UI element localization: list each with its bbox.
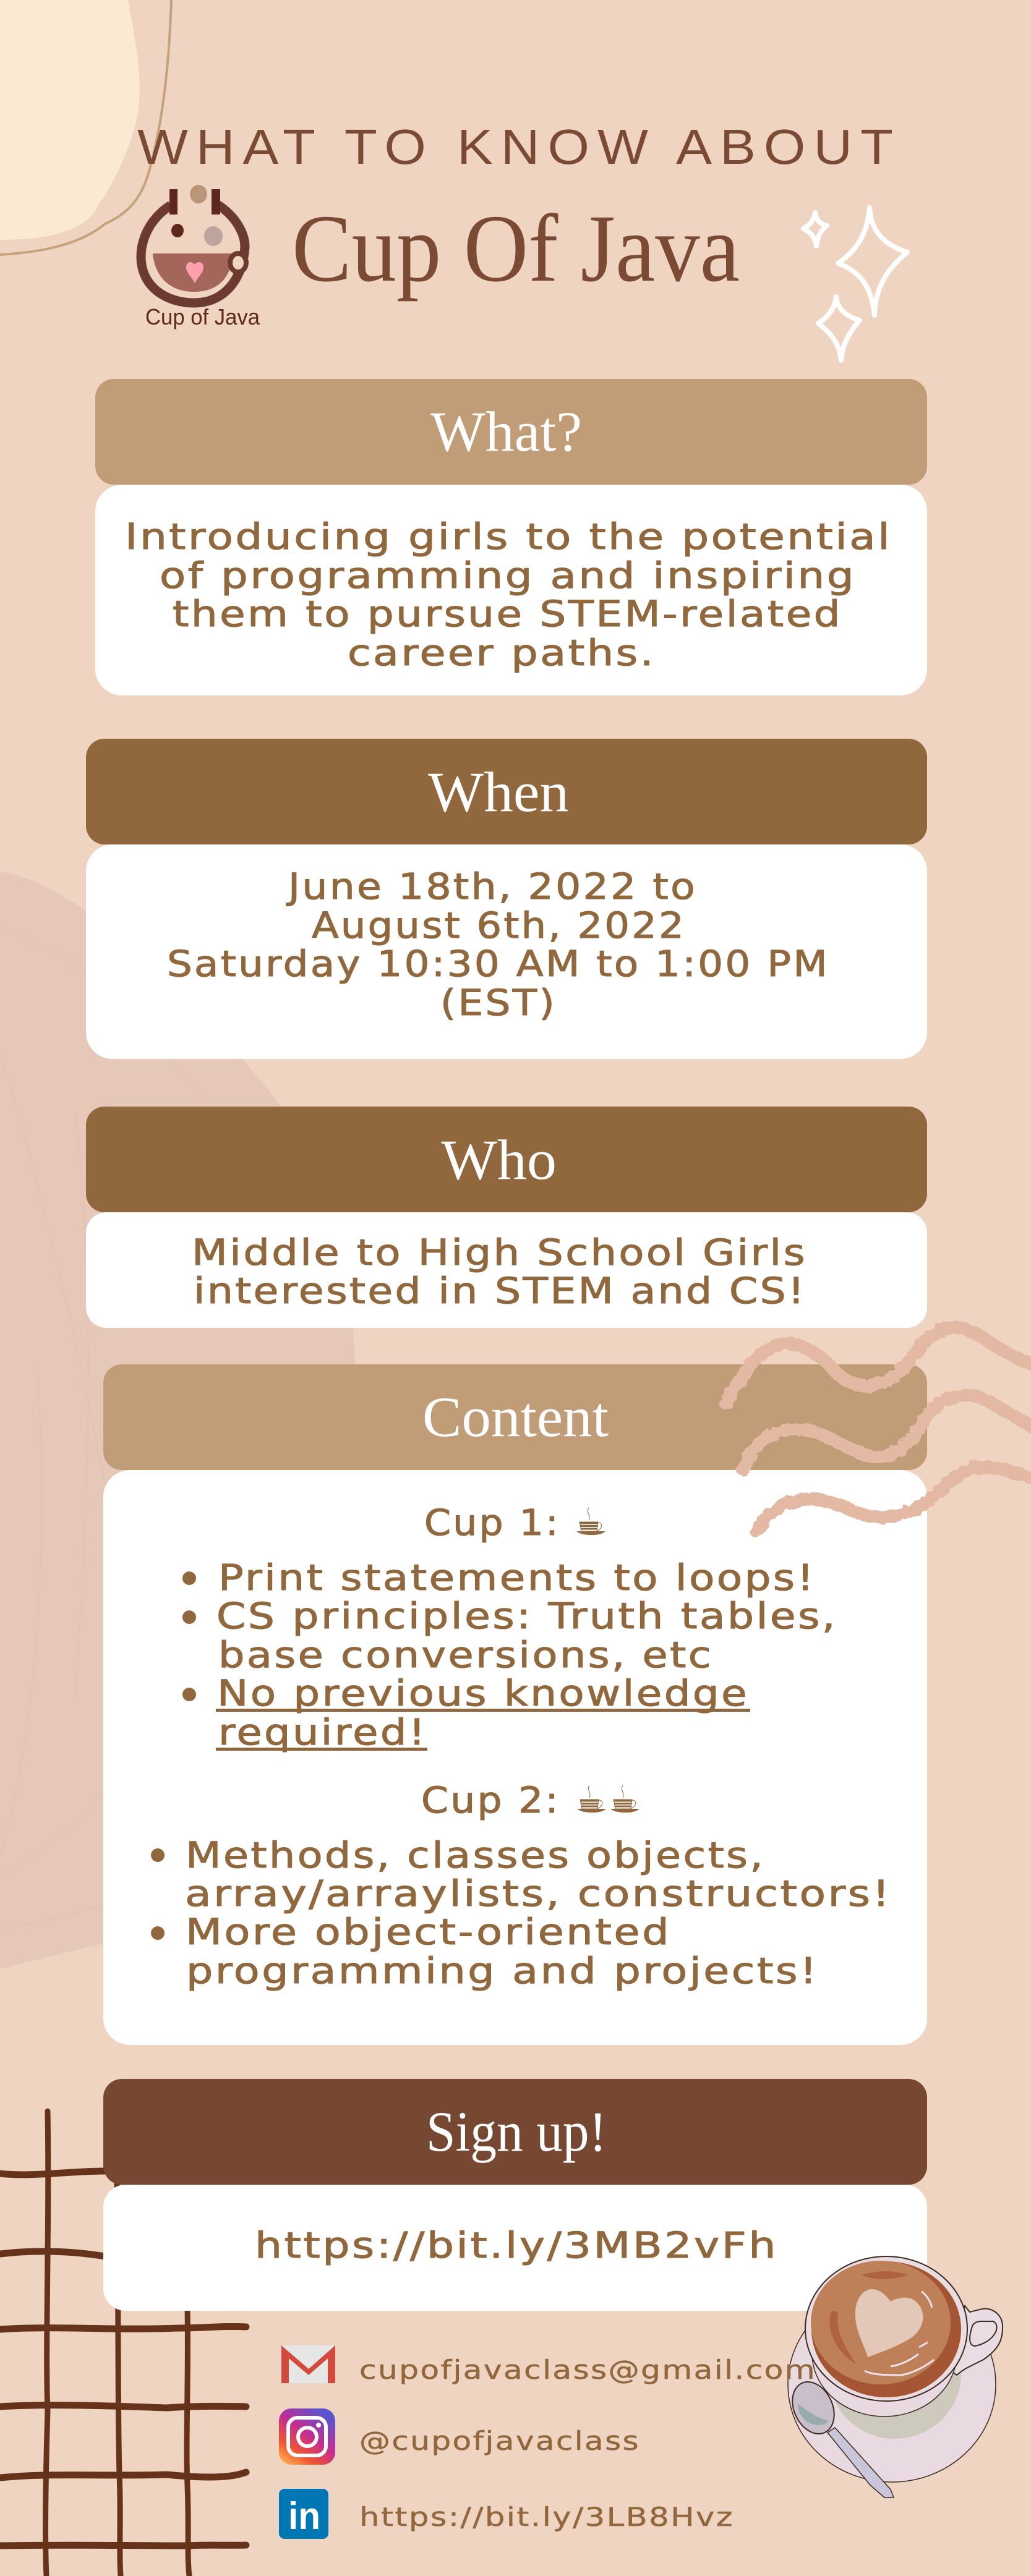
panel: Sign up	[103, 2079, 927, 2311]
Cup 1 bullet list: Print statements to loops!	[218, 1557, 816, 1599]
Content header bar	[103, 1364, 927, 1470]
Sign up heading: Sign up!	[426, 2100, 607, 2163]
squiggle brush strokes	[726, 1327, 1031, 1531]
Sign up body card	[103, 2185, 927, 2311]
When body text: Saturday 10:30 AM to 1:00 PM	[167, 943, 829, 985]
Who heading: Who	[441, 1128, 557, 1191]
What body text: them to pursue STEM-related	[173, 593, 842, 635]
title: WHAT TO KNOW ABOUT	[137, 119, 901, 174]
When body text: June 18th, 2022 to	[286, 865, 697, 908]
Who header bar	[86, 1107, 927, 1212]
icon: instagram	[279, 2408, 335, 2465]
panel: Content	[103, 1364, 927, 2045]
Cup 1 bullet list: base conversions, etc	[218, 1634, 713, 1676]
panel: What	[95, 379, 927, 695]
panel: When	[86, 739, 927, 1059]
logo: Cup of Java	[145, 304, 260, 329]
icon: linkedin	[279, 2489, 328, 2539]
contact: linkedin: https://bit.ly/3LB8Hvz	[359, 2502, 734, 2532]
Cup 1 bullet list: required!	[218, 1711, 427, 1753]
logo	[141, 185, 260, 329]
Who body text	[192, 1231, 807, 1312]
icon: coffee cup	[576, 1508, 605, 1535]
contact: instagram: @cupofjavaclass	[359, 2426, 640, 2456]
What body text: of programming and inspiring	[160, 555, 856, 597]
sparkles	[803, 208, 907, 360]
icon: gmail	[281, 2345, 335, 2383]
cream corner blob	[0, 0, 140, 240]
When heading: When	[428, 760, 569, 823]
background brush texture	[0, 872, 356, 1969]
contact: email: cupofjavaclass@gmail.com	[359, 2355, 816, 2385]
What body text	[125, 516, 892, 674]
Cup 1 heading: Cup 1:	[424, 1502, 560, 1544]
What body card	[95, 485, 927, 695]
What body text: career paths.	[348, 632, 656, 674]
icon: two coffee cups	[577, 1785, 640, 1813]
hand-drawn grid	[0, 2111, 246, 2576]
Content body card	[103, 1470, 927, 2045]
Cup 2 bullet list: programming and projects!	[186, 1950, 819, 1992]
Who body card	[86, 1212, 927, 1328]
What body text: Introducing girls to the potential	[125, 516, 892, 558]
Who body text: Middle to High School Girls	[192, 1231, 807, 1273]
Who body text: interested in STEM and CS!	[194, 1270, 806, 1312]
heading: Cup Of Java: Cup Of Java	[292, 195, 740, 302]
When body text: (EST)	[440, 982, 557, 1024]
When body card	[86, 844, 927, 1059]
When body text: August 6th, 2022	[312, 904, 686, 946]
Cup 1 bullet list	[182, 1557, 837, 1753]
Cup 1 bullet list: CS principles: Truth tables,	[216, 1595, 837, 1637]
Sign up header bar	[103, 2079, 927, 2185]
icon: linkedin: in	[288, 2495, 320, 2538]
When body text	[167, 865, 829, 1024]
Cup 2 bullet list: More object-oriented	[186, 1911, 671, 1953]
Cup 2 bullet list	[151, 1834, 892, 1992]
Cup 2 bullet list: Methods, classes objects,	[186, 1834, 765, 1876]
corner curve line	[0, 0, 171, 255]
Cup 2 heading: Cup 2:	[421, 1779, 560, 1821]
Content heading: Content	[422, 1385, 609, 1448]
What heading: What?	[430, 400, 582, 463]
What header bar	[95, 379, 927, 485]
illustration: coffee cup with saucer and spoon	[784, 2256, 1003, 2497]
Cup 1 bullet list: No previous knowledge	[217, 1672, 749, 1714]
When header bar	[86, 739, 927, 844]
panel: Who	[86, 1107, 927, 1328]
Cup 2 bullet list: array/arraylists, constructors!	[185, 1872, 892, 1915]
sign up link: https://bit.ly/3MB2vFh	[255, 2224, 778, 2266]
